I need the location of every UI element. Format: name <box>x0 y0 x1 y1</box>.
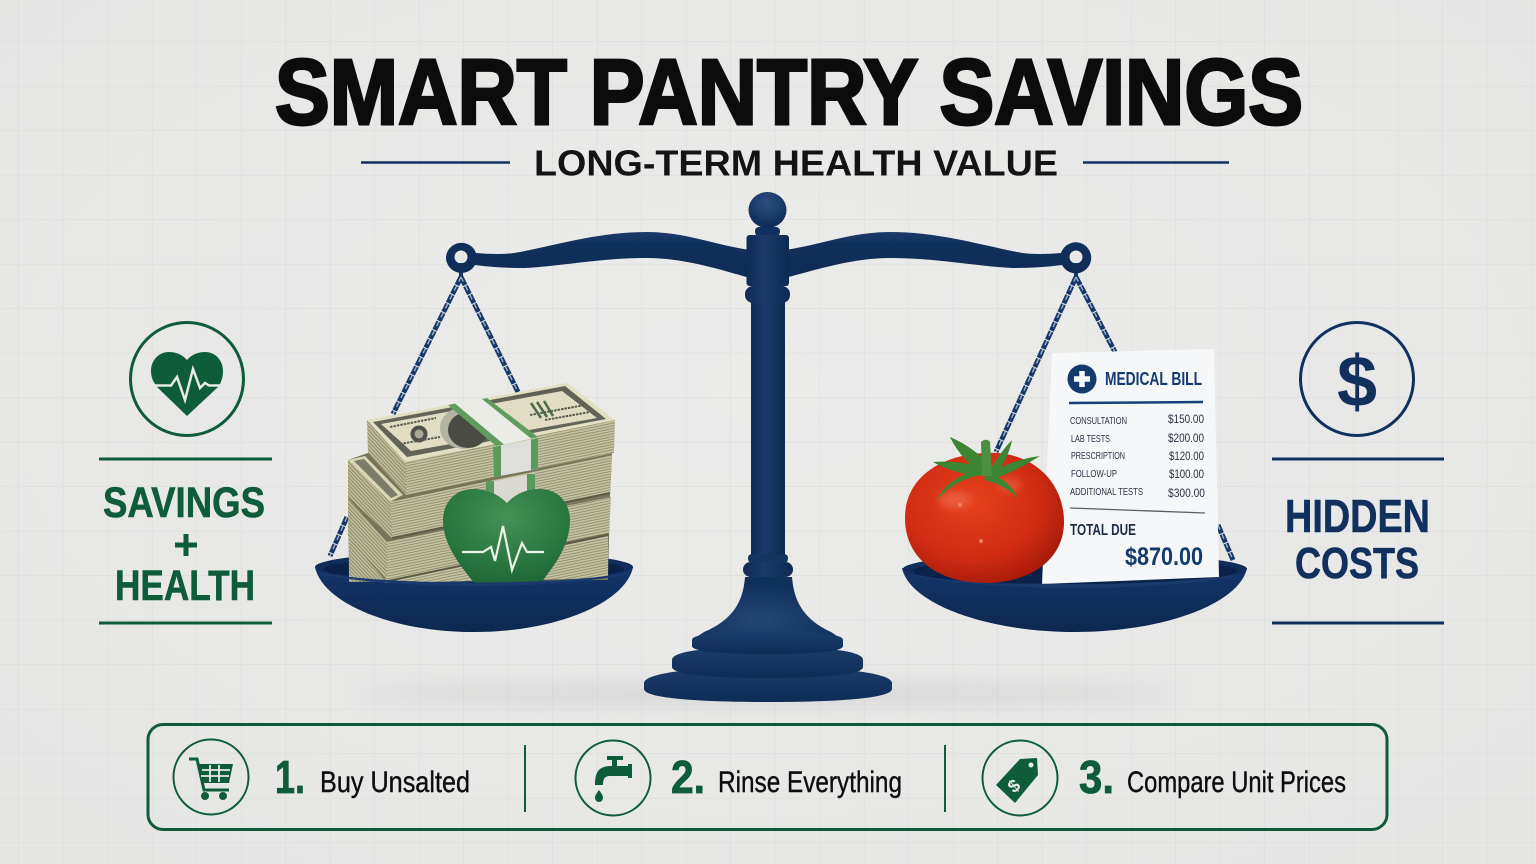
panel: savings plus health label <box>99 322 272 623</box>
subtitle: LONG-TERM HEALTH VALUE <box>534 142 1058 184</box>
bill line items: ADDITIONAL TESTS <box>1070 486 1143 498</box>
step 2 number: 2. <box>671 751 705 803</box>
step 3 text: Compare Unit Prices <box>1127 766 1346 799</box>
icon: price tag: $ <box>1004 775 1024 797</box>
bill line items: $200.00 <box>1168 431 1204 445</box>
right chains <box>996 263 1233 560</box>
panel: hidden costs label <box>1272 322 1444 623</box>
bill line items: PRESCRIPTION <box>1071 450 1125 462</box>
label: costs: COSTS <box>1295 539 1419 588</box>
stepped base <box>644 632 892 702</box>
icon: price tag <box>982 740 1058 816</box>
step 3 <box>982 740 1346 816</box>
plus sign <box>175 534 197 556</box>
bill line items <box>1070 412 1205 500</box>
step 2 <box>576 740 902 816</box>
beam <box>446 232 1091 278</box>
step 3 number: 3. <box>1079 751 1114 803</box>
bill total: $870.00 <box>1125 543 1203 571</box>
tomato <box>905 437 1064 583</box>
stack backing <box>348 440 612 582</box>
bill line items: CONSULTATION <box>1070 415 1127 427</box>
left pan front rim <box>318 572 630 586</box>
balance scale <box>315 192 1247 702</box>
label: savings: SAVINGS <box>103 479 265 527</box>
icon: faucet <box>576 740 650 816</box>
step 1 number: 1. <box>275 751 305 803</box>
step 2 text: Rinse Everything <box>718 766 902 799</box>
bill header: MEDICAL BILL <box>1105 369 1202 389</box>
lower ring <box>743 554 793 577</box>
left chains <box>330 263 518 556</box>
hub ring <box>745 286 790 303</box>
ground shadow <box>358 686 1178 702</box>
green heart with pulse <box>443 489 570 584</box>
knob <box>748 192 786 228</box>
medical bill <box>1042 349 1219 584</box>
bill line items: $150.00 <box>1168 412 1204 426</box>
bundle 4 <box>349 535 608 583</box>
bundle 1 <box>367 383 615 495</box>
title: SMART PANTRY SAVINGS <box>275 40 1303 144</box>
bill total: TOTAL DUE <box>1070 522 1136 539</box>
column <box>751 300 785 556</box>
bill line items: $120.00 <box>1169 449 1204 463</box>
step 1 text: Buy Unsalted <box>320 766 470 799</box>
icon: shopping cart <box>174 740 248 814</box>
hub block <box>746 235 789 286</box>
label: health: HEALTH <box>115 562 255 610</box>
right pan front rim <box>910 574 1240 588</box>
bill line items: LAB TESTS <box>1071 433 1110 445</box>
separators between bundles <box>388 493 610 581</box>
bundle 2 <box>348 455 612 538</box>
flared foot <box>692 577 843 640</box>
bundle 3 <box>348 497 611 580</box>
step 1 <box>174 740 470 814</box>
tomato leaves <box>933 437 1040 500</box>
bill total <box>1070 522 1203 571</box>
icon: heart with pulse <box>130 322 244 436</box>
left pan <box>315 552 633 632</box>
money stack <box>348 383 615 584</box>
bill line items: $100.00 <box>1169 467 1204 481</box>
icon: dollar sign: $ <box>1337 342 1377 422</box>
bill line items: $300.00 <box>1168 486 1205 500</box>
band <box>448 398 538 506</box>
icon: dollar sign <box>1300 322 1414 436</box>
bill header <box>1068 364 1202 394</box>
collar <box>755 227 780 236</box>
right pan <box>902 553 1247 632</box>
bill line items: FOLLOW-UP <box>1071 468 1117 480</box>
label: hidden: HIDDEN <box>1285 490 1430 542</box>
panel: action steps <box>148 724 1387 830</box>
